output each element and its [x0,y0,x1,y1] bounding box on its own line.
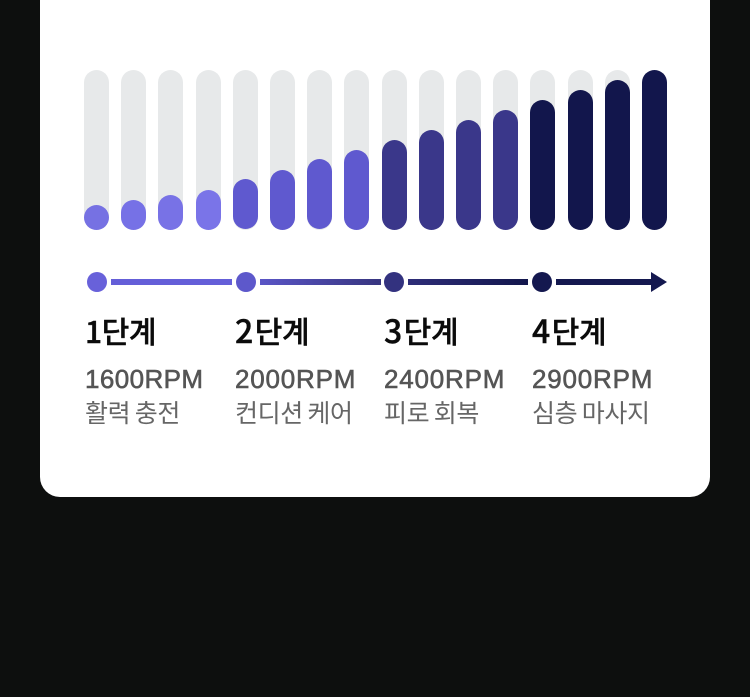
marker: stage 3 [384,272,404,292]
arrow head [651,272,667,292]
bar 1 [84,70,109,230]
stage 1 text: 1단계 [85,308,156,352]
bar 7 [307,70,332,230]
stage 2 text [235,307,356,428]
marker: stage 1 [87,272,107,292]
bar 12 [493,70,518,230]
stage 3 text [384,307,505,428]
bar 10 [419,70,444,230]
stage 1 text: 1600RPM [85,364,203,394]
stage 2 text: 2단계 [235,307,309,353]
bar 8 [344,70,369,230]
bar 11 [456,70,481,230]
stage 4 text: 심층 마사지 [532,400,650,428]
marker: stage 2 [236,272,256,292]
bar 2 [121,70,146,230]
stage 2 text: 컨디션 케어 [235,400,353,428]
stage 4 text: 4단계 [532,307,606,353]
bar 9 [382,70,407,230]
stage 1 text: 활력 충전 [85,400,180,428]
bar 4 [196,70,221,230]
marker: stage 4 [532,272,552,292]
stage 3 text: 2400RPM [384,364,505,394]
stage 3 text: 피로 회복 [384,400,479,428]
stage 4 text [532,307,653,428]
panel: white card [40,0,710,497]
stage 1 text [85,308,203,428]
stage 4 text: 2900RPM [532,364,653,394]
bar 16 [642,70,667,230]
stage 3 text: 3단계 [384,307,458,353]
bar 3 [158,70,183,230]
bar 15 [605,70,630,230]
bar 6 [270,70,295,230]
bar 14 [568,70,593,230]
bar 5 [233,70,258,230]
bar 13 [530,70,555,230]
stage 2 text: 2000RPM [235,364,356,394]
bar chart: sixteen RPM bars [84,70,667,230]
timeline arrow with stage markers [87,272,667,292]
